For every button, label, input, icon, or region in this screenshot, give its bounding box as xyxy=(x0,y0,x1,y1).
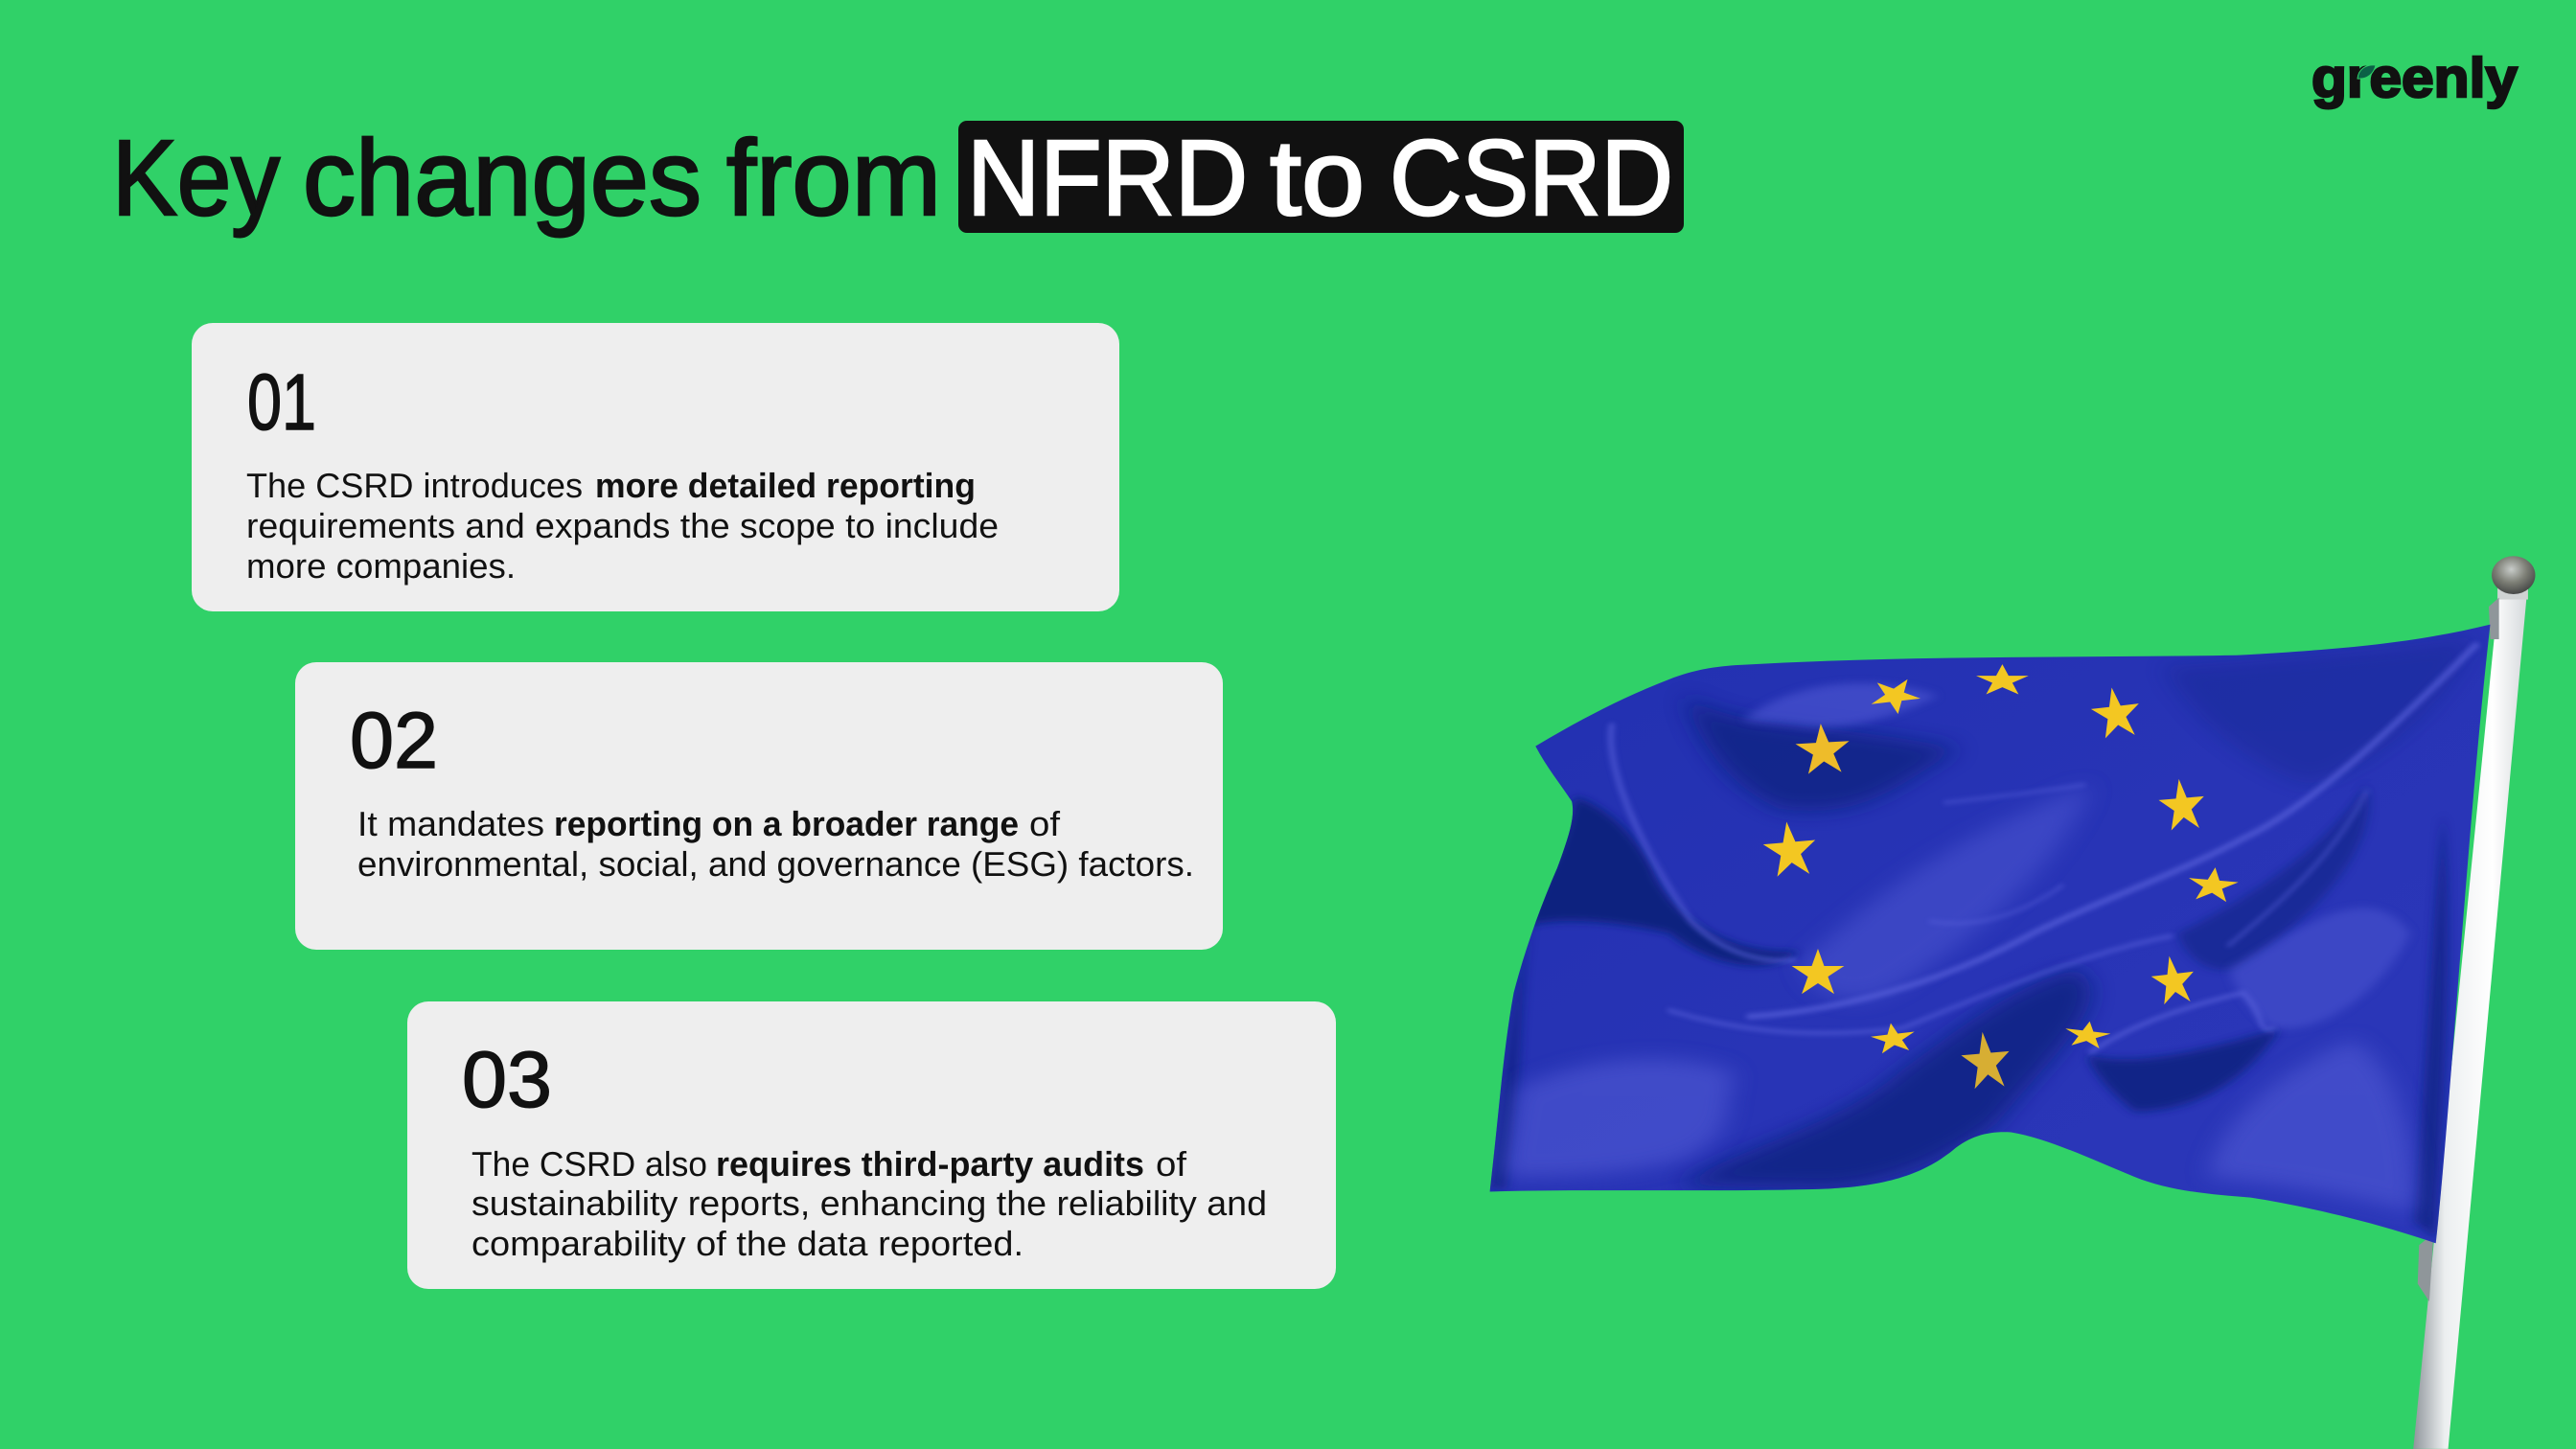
panel: card 02 xyxy=(295,662,1223,950)
title highlight box: CSRD xyxy=(1390,118,1673,238)
fold highlights xyxy=(1503,683,2414,1212)
card 03 body text: The CSRD also xyxy=(472,1144,707,1184)
flag cloth xyxy=(1474,612,2505,1266)
title text: dark part: from xyxy=(726,118,941,238)
card 02 body text: reporting on a broader range xyxy=(554,804,1019,843)
card 01 body text: The CSRD introduces xyxy=(246,466,583,505)
EU stars circle xyxy=(1760,664,2240,1090)
title text: dark part xyxy=(112,118,941,238)
title highlight box xyxy=(958,118,1684,238)
card 01 body text: more companies. xyxy=(246,546,516,586)
panel: card 03 xyxy=(407,1001,1336,1289)
fold shadows xyxy=(1490,636,2475,1239)
logo: greenly: greenly xyxy=(2312,47,2518,109)
card 03 body text: requires third-party audits xyxy=(716,1144,1144,1184)
title highlight box: to xyxy=(1270,118,1365,238)
card 02 body text: of xyxy=(1029,804,1061,843)
card 01 body text xyxy=(246,466,999,586)
card 01 body text: requirements and expands the scope to include xyxy=(246,506,999,545)
card 03 body text: comparability of the data reported. xyxy=(472,1224,1024,1263)
title text: dark part: changes xyxy=(303,118,702,238)
card 01 number: 01 xyxy=(247,357,316,447)
card 03 body text: sustainability reports, enhancing the reliability and xyxy=(472,1184,1267,1223)
card 03 body text: of xyxy=(1156,1144,1187,1184)
title text: dark part: Key xyxy=(112,118,280,238)
card 02 body text: It mandates xyxy=(357,804,544,843)
panel: card 01 xyxy=(192,323,1119,611)
title xyxy=(112,118,1684,238)
pole finial xyxy=(2492,556,2535,600)
card 02 number: 02 xyxy=(350,696,438,785)
title highlight box: NFRD xyxy=(967,118,1248,238)
card 02 body text xyxy=(357,804,1194,884)
flag pole xyxy=(2413,556,2535,1449)
card 01 body text: more detailed reporting xyxy=(595,466,976,505)
icon: logo leaf xyxy=(2358,65,2376,79)
illustration: EU flag on pole xyxy=(1474,556,2535,1449)
card 02 body text: environmental, social, and governance (ESG) factors. xyxy=(357,844,1194,884)
card 03 number: 03 xyxy=(462,1035,552,1124)
fold creases xyxy=(1611,645,2475,1052)
card 03 body text xyxy=(472,1144,1267,1263)
